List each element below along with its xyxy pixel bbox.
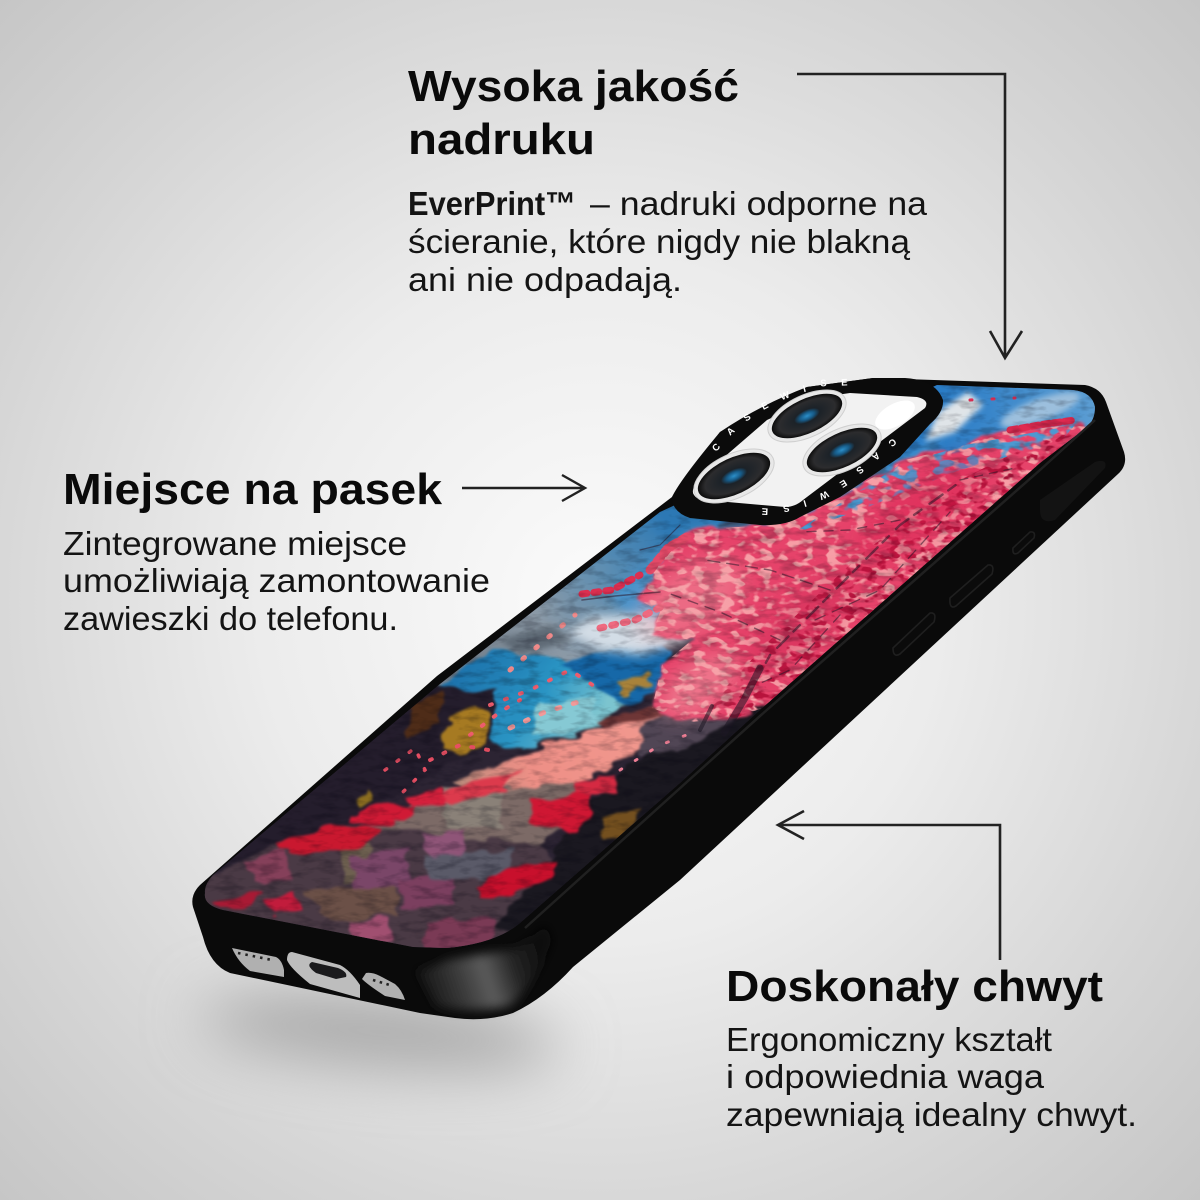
- camera module: [672, 378, 944, 526]
- blossom tree canopy: [640, 425, 1087, 722]
- callout: grip: [726, 962, 1137, 1133]
- port: USB-C opening: [287, 952, 360, 998]
- heading: Wysoka jakość: [408, 62, 739, 111]
- heading: Doskonały chwyt: [726, 962, 1103, 1011]
- arrow: to strap slot: [462, 475, 585, 501]
- description: umożliwiają zamontowanie: [63, 562, 490, 599]
- paving stones: [247, 785, 512, 950]
- case body: [192, 378, 1125, 1019]
- canopy highlights: [640, 425, 1087, 722]
- cloud: [998, 390, 1082, 430]
- phone drop shadow: [198, 982, 562, 1082]
- arrow: to grip edge: [778, 811, 1000, 960]
- callout: print quality: [408, 62, 928, 298]
- glossy bottom corner: [416, 925, 552, 1010]
- description: Ergonomiczny kształt: [726, 1021, 1052, 1058]
- side buttons: [893, 532, 1034, 655]
- description: ani nie odpadają.: [408, 261, 682, 298]
- white camera plate: [693, 393, 926, 507]
- sky showing through top of canopy: [790, 425, 1075, 535]
- description: – nadruki odporne na: [590, 185, 928, 222]
- callout: strap slot: [63, 465, 490, 637]
- lens left: [686, 438, 782, 514]
- screen rim highlight: [525, 420, 1095, 928]
- heading: Miejsce na pasek: [63, 465, 443, 514]
- bumper brand text top: CASEWISE: [712, 379, 848, 450]
- phone case illustration: [192, 378, 1126, 1020]
- bumper brand text bottom: CASEWISE: [762, 439, 896, 515]
- screen painting: spring blossom landscape: [204, 385, 1095, 948]
- painted landscape base: [200, 375, 1110, 955]
- camera bumper: [672, 378, 943, 525]
- heading: nadruku: [408, 115, 595, 164]
- loose branch flowers and petals: [385, 398, 1075, 800]
- port: left speaker: [232, 948, 284, 977]
- description: i odpowiednia waga: [726, 1058, 1045, 1095]
- description: zawieszki do telefonu.: [63, 600, 398, 637]
- lens right: [795, 413, 889, 487]
- side switch: [1040, 461, 1106, 521]
- lens top: [760, 379, 854, 453]
- inner glare: [870, 394, 920, 436]
- description: zapewniają idealny chwyt.: [726, 1096, 1137, 1133]
- description: [726, 1021, 1137, 1133]
- sky band behind blossoms: [610, 440, 940, 640]
- tonal blooms: [622, 440, 999, 729]
- port: right speaker: [362, 973, 405, 1000]
- pale cloud between branches: [566, 614, 690, 655]
- description: [63, 525, 490, 637]
- canopy shadows: [700, 427, 1087, 718]
- description: [408, 185, 928, 298]
- description: Zintegrowane miejsce: [63, 525, 407, 562]
- paint grain: [208, 386, 1095, 948]
- tree branches and trunk: [582, 468, 1015, 733]
- description: EverPrint™: [408, 185, 576, 222]
- description: ścieranie, które nigdy nie blakną: [408, 223, 911, 260]
- red flower patches: [215, 772, 615, 914]
- arrow: to print surface: [797, 74, 1022, 358]
